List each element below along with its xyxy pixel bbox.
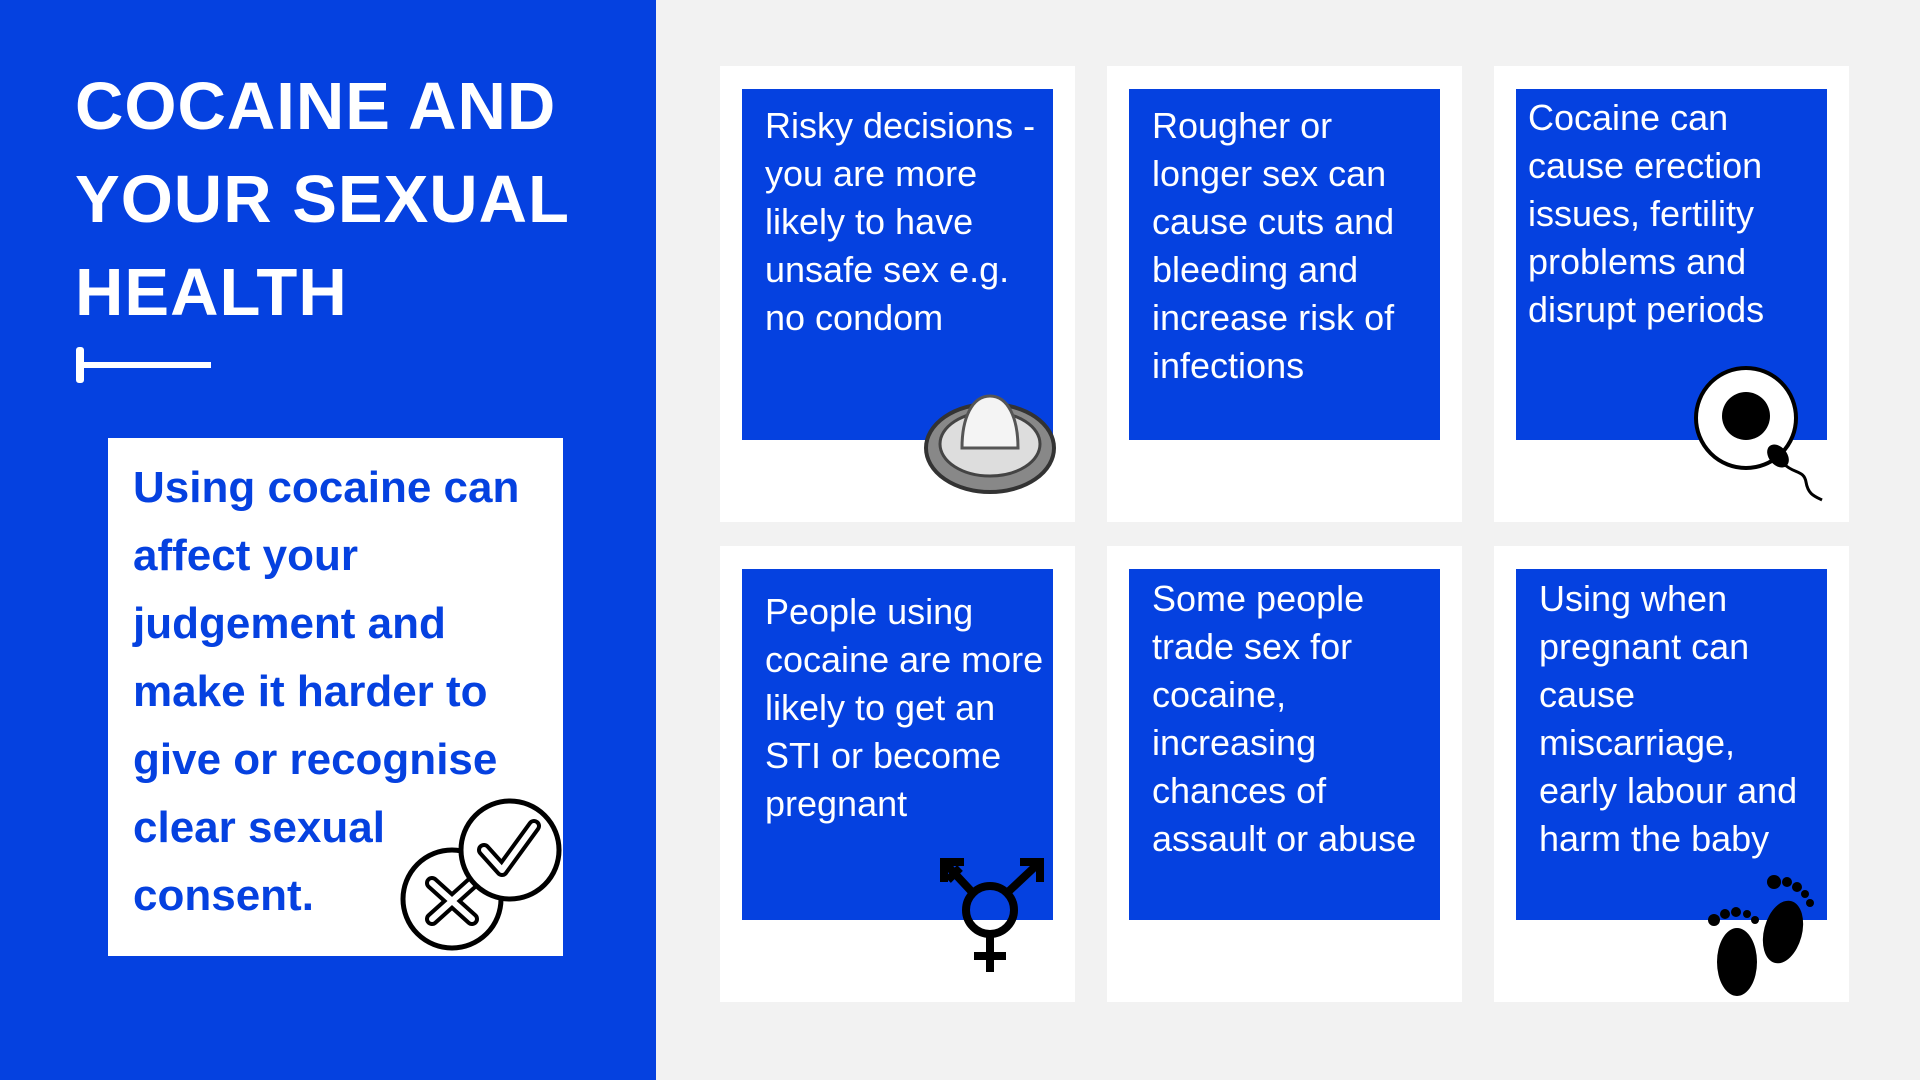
card: trading sex xyxy=(1107,546,1462,1002)
card: risky decisions: likely to have xyxy=(765,201,973,242)
card: erection and fertility: disrupt periods xyxy=(1528,289,1764,330)
card: risky decisions: no condom xyxy=(765,297,943,338)
card: risky decisions xyxy=(720,66,1075,522)
card: erection and fertility: Cocaine can xyxy=(1528,97,1728,138)
card: rougher sex: cause cuts and xyxy=(1152,201,1394,242)
intro text: make it harder to xyxy=(133,667,488,716)
intro text: Using cocaine can xyxy=(133,463,519,512)
card: pregnancy: miscarriage, xyxy=(1539,722,1735,763)
card: trading sex: cocaine, xyxy=(1152,674,1286,715)
title: HEALTH xyxy=(75,255,348,330)
card: rougher sex: longer sex can xyxy=(1152,153,1386,194)
card: erection and fertility: cause erection xyxy=(1528,145,1762,186)
card: risky decisions: you are more xyxy=(765,153,977,194)
icon: gender symbol xyxy=(940,858,1044,972)
card: STI risk: STI or become xyxy=(765,735,1001,776)
title xyxy=(75,69,570,330)
card: pregnancy: harm the baby xyxy=(1539,818,1769,859)
title: COCAINE AND xyxy=(75,69,556,144)
card: rougher sex: infections xyxy=(1152,345,1304,386)
intro text: consent. xyxy=(133,871,314,920)
title: YOUR SEXUAL xyxy=(75,162,570,237)
icon: baby feet xyxy=(1708,875,1814,996)
icon: check and cross xyxy=(400,798,562,950)
card: pregnancy: pregnant can xyxy=(1539,626,1749,667)
card: STI risk: People using xyxy=(765,591,973,632)
icon: sperm and egg xyxy=(1694,366,1823,502)
card: erection and fertility: issues, fertility xyxy=(1528,193,1754,234)
card: trading sex: assault or abuse xyxy=(1152,818,1416,859)
intro text: clear sexual xyxy=(133,803,385,852)
card: erection and fertility xyxy=(1494,66,1849,522)
card: pregnancy xyxy=(1494,546,1849,1002)
card: rougher sex: Rougher or xyxy=(1152,105,1332,146)
left panel xyxy=(0,0,656,1080)
card: risky decisions: Risky decisions - xyxy=(765,105,1035,146)
intro text xyxy=(132,463,519,920)
intro text: give or recognise xyxy=(133,735,497,784)
intro text: affect your xyxy=(133,531,358,580)
card: trading sex: increasing xyxy=(1152,722,1316,763)
card: STI risk: cocaine are more xyxy=(765,639,1043,680)
card: rougher sex: increase risk of xyxy=(1152,297,1394,338)
title underline xyxy=(76,362,211,368)
intro text: judgement and xyxy=(133,599,446,648)
card: risky decisions: unsafe sex e.g. xyxy=(765,249,1009,290)
card: trading sex: trade sex for xyxy=(1152,626,1352,667)
card: pregnancy: cause xyxy=(1539,674,1635,715)
card: rougher sex: bleeding and xyxy=(1152,249,1358,290)
card: erection and fertility: problems and xyxy=(1528,241,1746,282)
card: STI risk: pregnant xyxy=(765,783,907,824)
card: rougher sex xyxy=(1107,66,1462,522)
card: trading sex: chances of xyxy=(1152,770,1326,811)
card: STI risk: likely to get an xyxy=(765,687,995,728)
card: pregnancy: Using when xyxy=(1539,578,1727,619)
card: STI risk xyxy=(720,546,1075,1002)
icon: condom xyxy=(924,394,1056,494)
card: trading sex: Some people xyxy=(1152,578,1364,619)
card: pregnancy: early labour and xyxy=(1539,770,1797,811)
intro box xyxy=(108,438,563,956)
